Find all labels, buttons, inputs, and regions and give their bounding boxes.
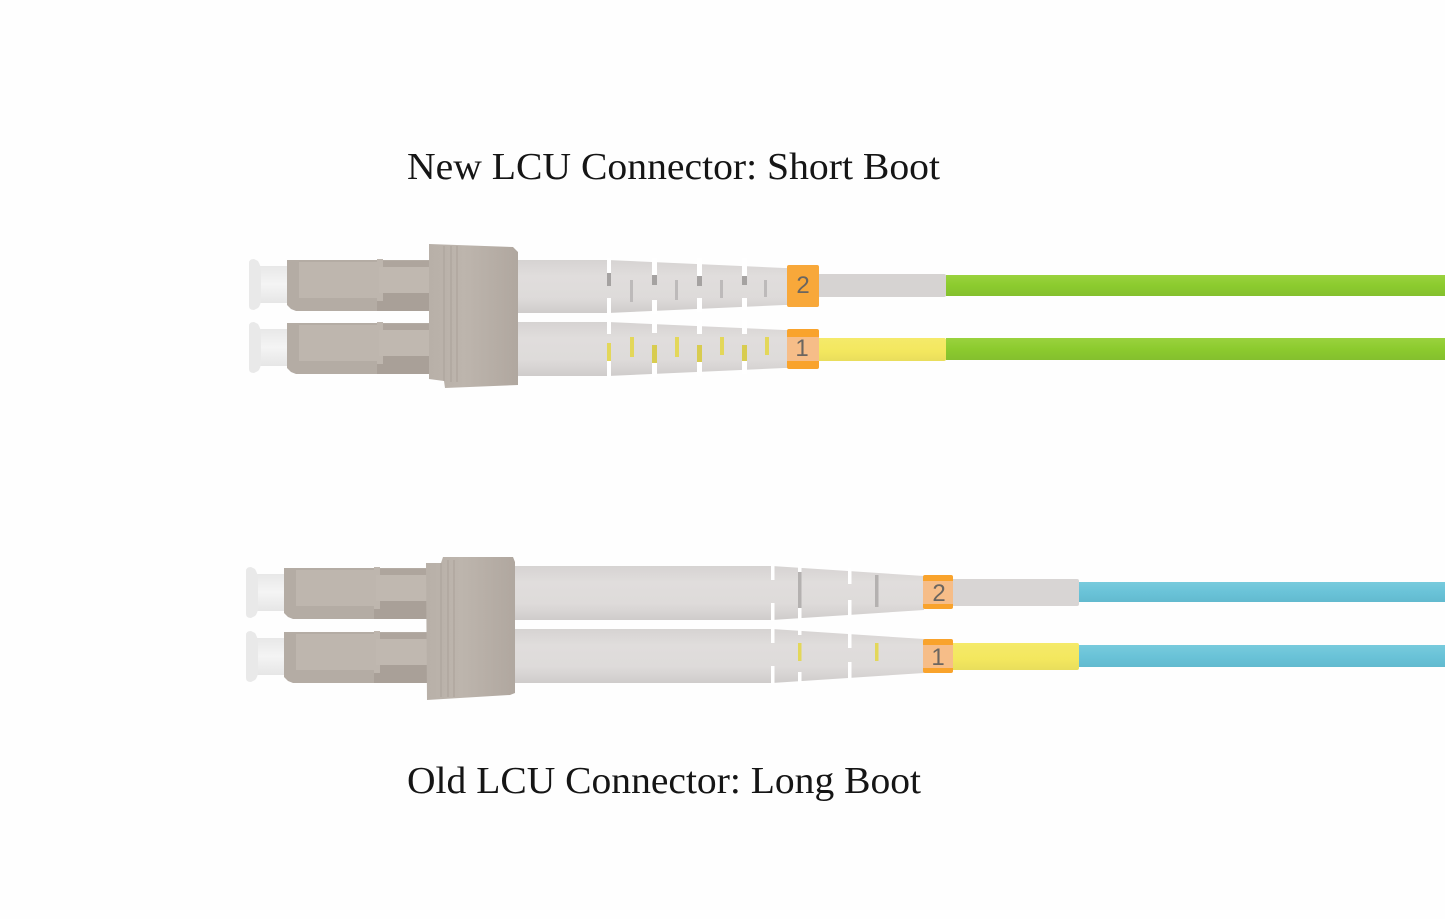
orange label 1: 1 xyxy=(931,644,945,671)
upper LC plug xyxy=(249,259,431,311)
duplex clip xyxy=(429,244,518,388)
orange label 2 xyxy=(787,265,819,307)
orange label 1 xyxy=(787,329,819,369)
yellow inner tube xyxy=(815,338,946,361)
orange label 2: 2 xyxy=(932,580,946,607)
upper long boot xyxy=(512,564,924,621)
heading: new connector: New LCU Connector: Short Boot xyxy=(407,146,940,188)
blue fiber cable 2 xyxy=(1078,582,1445,602)
blue fiber cable 1 xyxy=(1078,645,1445,667)
orange label 2: 2 xyxy=(796,272,810,299)
orange label 1: 1 xyxy=(795,335,809,362)
green fiber cable 2 xyxy=(946,275,1445,296)
heading: old connector: Old LCU Connector: Long Boot xyxy=(407,760,921,802)
lower LC plug xyxy=(249,322,431,374)
yellow inner tube xyxy=(948,643,1079,670)
old LCU connector: long boot xyxy=(246,557,1445,700)
gray inner tube xyxy=(948,579,1079,606)
orange label 2 xyxy=(923,575,953,609)
new LCU connector: short boot xyxy=(249,244,1445,388)
gray inner tube xyxy=(815,274,946,297)
lower long boot xyxy=(512,627,924,684)
lower short boot xyxy=(516,320,788,378)
orange label 1 xyxy=(923,639,953,673)
green fiber cable 1 xyxy=(946,338,1445,360)
lower LC plug xyxy=(246,631,428,683)
duplex clip xyxy=(426,557,515,700)
upper LC plug xyxy=(246,567,428,619)
upper short boot xyxy=(516,258,788,315)
